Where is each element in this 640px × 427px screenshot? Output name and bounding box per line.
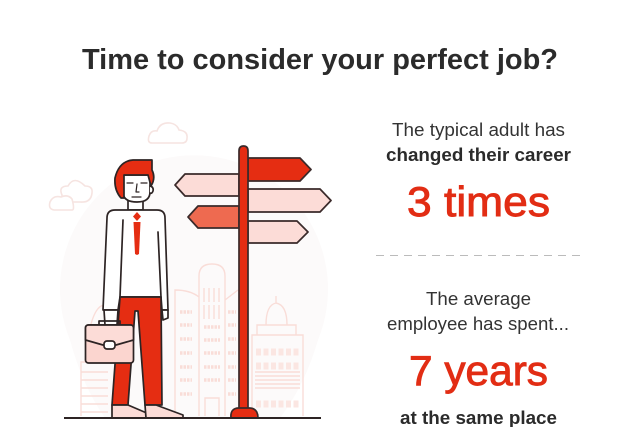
signpost [175,146,331,418]
stat block: career changes [386,119,571,225]
number: 7 years: 7 years [409,347,548,394]
head [123,175,150,202]
text: employee has spent: employee has spent... [387,313,569,334]
person [86,160,183,418]
shoes [112,405,149,418]
trousers [112,297,162,405]
icon: cloud left [50,180,92,210]
pole base [231,408,258,418]
sign: lower right [248,221,308,243]
ear [150,186,153,193]
illustration [50,123,331,419]
text: changed their career: changed their career [386,144,571,165]
shirt [103,210,168,310]
background circle [60,155,328,418]
briefcase [86,321,134,363]
sign: lower left [188,206,239,228]
ground line [64,417,321,419]
sleeve lines [120,220,161,297]
tie [133,212,141,255]
hand left [104,310,118,325]
hand right [162,310,168,320]
text: the average: The average [426,288,531,309]
sign: top right [248,158,311,181]
sign: upper left [175,174,239,196]
icon: cloud top [148,123,187,143]
title: Time to consider your perfect job? [82,44,558,76]
divider [376,254,581,256]
face details [127,183,147,197]
stat block: tenure [387,288,569,427]
number: 3 times: 3 times [407,178,550,225]
city skyline [81,264,303,416]
sign: long right [248,189,331,212]
text: typical adult: The typical adult has [392,119,565,140]
neck [128,198,143,210]
hair [115,160,154,198]
pole [239,146,248,412]
